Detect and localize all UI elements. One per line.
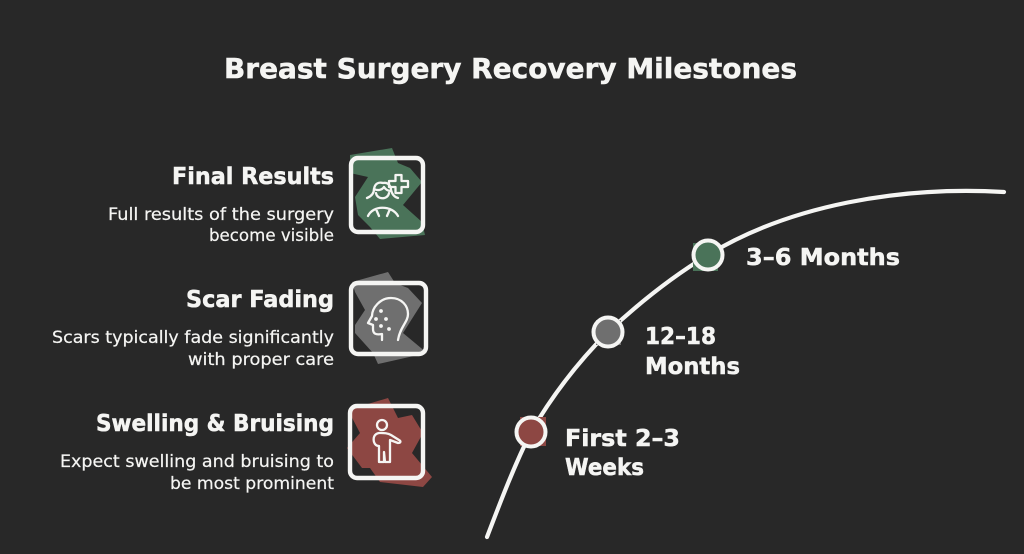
icon: face with scars [351, 272, 427, 364]
text block: swelling description [60, 452, 335, 493]
title: Breast Surgery Recovery Milestones [224, 52, 797, 85]
milestone label: first 2-3 weeks [565, 426, 680, 481]
milestone marker: 3-6 months [693, 240, 722, 271]
text block: scar fading description [52, 328, 334, 369]
text block: final results description: become visible [209, 226, 334, 245]
panel: scar fading [52, 272, 427, 369]
milestone label: first 2-3 weeks: First 2–3 [565, 426, 680, 452]
text block: scar fading description: Scars typically fade significantly [52, 328, 334, 347]
text block: scar fading description: with proper care [188, 350, 334, 369]
milestone label: 3-6 months: 3–6 Months [746, 245, 900, 271]
icon: doctor with medical cross [350, 148, 425, 239]
panel: final results [108, 148, 425, 245]
milestone label: 12-18 months [645, 324, 740, 380]
text block: final results description: Full results of the surgery [108, 205, 334, 224]
milestone marker: first 2-3 weeks [516, 417, 546, 446]
milestone label: first 2-3 weeks: Weeks [565, 455, 644, 481]
text block: swelling description: Expect swelling and bruising to [60, 452, 334, 471]
curve: recovery timeline [487, 191, 1004, 537]
icon: person with bruising [347, 398, 432, 487]
heading: swelling and bruising: Swelling & Bruising [96, 411, 334, 437]
heading: scar fading: Scar Fading [186, 287, 334, 313]
heading: final results: Final Results [172, 164, 334, 190]
text block: swelling description: be most prominent [170, 474, 335, 493]
panel: swelling and bruising [60, 398, 432, 493]
milestone marker: 12-18 months [594, 318, 622, 346]
milestone label: 12-18 months: Months [645, 354, 740, 380]
text block: final results description [108, 205, 334, 245]
milestone label: 12-18 months: 12–18 [645, 324, 716, 350]
